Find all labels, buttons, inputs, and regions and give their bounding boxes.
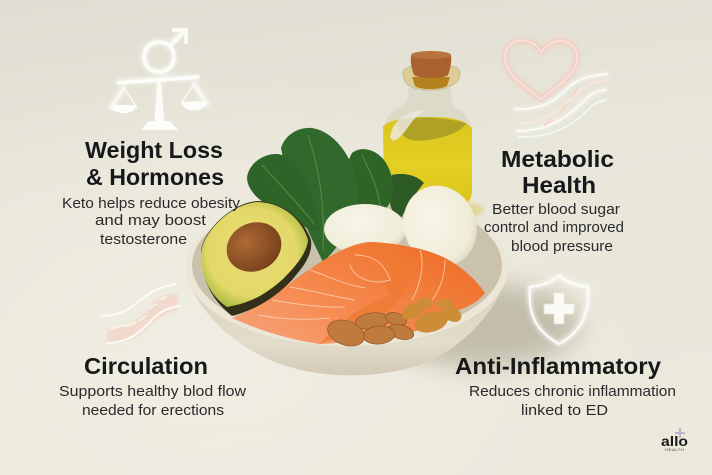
heading: metabolic health — [501, 146, 614, 198]
heading: metabolic health: Health — [522, 172, 596, 198]
text block: weight loss and hormones — [62, 137, 241, 248]
description: circulation: Supports healthy blod flow — [59, 384, 247, 400]
description: anti-inflammatory: linked to ED — [521, 403, 608, 419]
icon: circulation vessel — [102, 284, 179, 343]
description: metabolic health: blood pressure — [511, 239, 613, 255]
icon: heart and blood vessel — [505, 41, 607, 137]
bowl body — [186, 268, 508, 375]
text block: circulation — [59, 353, 247, 419]
description: metabolic health: Better blood sugar — [492, 202, 620, 218]
icon: shield with cross — [530, 276, 588, 344]
text block: metabolic health — [484, 146, 624, 255]
description: weight loss: and may boost — [95, 213, 206, 229]
description: anti-inflammatory: Reduces chronic inflammation — [469, 384, 676, 400]
heading: metabolic health: Metabolic — [501, 146, 614, 172]
logo: allo health: allo — [661, 433, 688, 449]
salmon — [232, 242, 485, 344]
description: metabolic health — [484, 202, 624, 255]
description: anti-inflammatory — [469, 384, 676, 419]
heading: weight loss: & Hormones — [86, 164, 224, 190]
description: circulation — [59, 384, 247, 419]
description: circulation: needed for erections — [82, 403, 224, 419]
avocado — [201, 201, 311, 316]
heading: weight loss — [85, 137, 224, 190]
almonds and walnuts — [324, 296, 464, 351]
icon: gender and scales — [110, 30, 208, 130]
description: weight loss: testosterone — [100, 232, 187, 248]
description: weight loss — [62, 196, 241, 248]
logo: allo health: HEALTH — [665, 447, 684, 452]
description: weight loss: Keto helps reduce obesity — [62, 196, 241, 212]
eggs — [324, 174, 489, 278]
logo: allo health — [661, 428, 688, 452]
heading: weight loss: Weight Loss — [85, 137, 223, 163]
heading: anti-inflammatory: Anti-Inflammatory — [455, 353, 661, 379]
bowl with food — [186, 128, 508, 375]
icon: oil bottle — [383, 51, 484, 219]
heading: circulation: Circulation — [84, 353, 208, 379]
spinach leaves — [247, 128, 424, 262]
text block: anti-inflammatory — [455, 353, 676, 419]
description: metabolic health: control and improved — [484, 220, 624, 236]
